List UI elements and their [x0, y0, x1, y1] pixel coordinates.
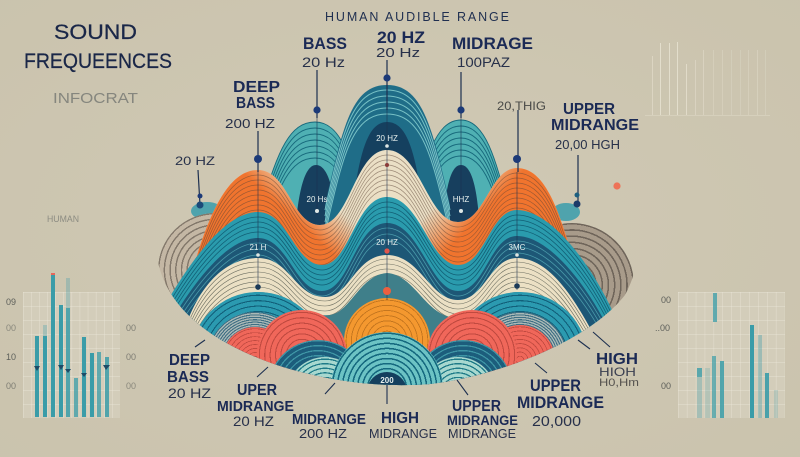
red accent dot [613, 182, 621, 190]
wave: cream [190, 255, 590, 386]
label: upper midrange right: MIDRANGE [551, 117, 639, 134]
label: upper midrange midrange [447, 398, 518, 441]
label: high [596, 351, 639, 389]
label: upper midrange lower left: MIDRANGE [217, 398, 294, 415]
label: upper midrange right: 20,00 HGH [555, 137, 620, 152]
inner band labels: 3MC [509, 243, 526, 252]
label: bass [302, 34, 347, 70]
wave: orange and cream [195, 150, 570, 400]
inner band labels: 20 HZ [376, 238, 398, 247]
chart: left axis numbers: 00 [6, 381, 16, 391]
label: 20 hz top: 20 HZ [377, 28, 425, 47]
label: midrange top [452, 34, 533, 70]
label: deep bass upper: 200 HZ [225, 116, 275, 131]
chart: right axis numbers: 00 [661, 295, 671, 305]
label: upper midrange lower left: 20 HZ [233, 413, 274, 429]
label: bass: BASS [303, 34, 347, 53]
label: high: HIOH [599, 365, 636, 379]
heading: human audible range: HUMAN AUDIBLE RANGE [325, 10, 509, 24]
label: 20 high: 20,THIG [497, 99, 546, 113]
arch: right coral [428, 310, 517, 383]
chart: left axis numbers: 09 [6, 297, 16, 307]
label: deep bass upper [225, 79, 280, 131]
label: upper midrange 20,000: MIDRANGE [517, 394, 604, 412]
label: midrange top: 100PAZ [457, 54, 510, 70]
arches: lower left [200, 292, 322, 377]
subtitle: INFOCRAT [53, 90, 138, 107]
label: midrange lower: 200 HZ [299, 426, 347, 441]
side hump: right grey [556, 203, 633, 317]
label: upper midrange midrange: UPPER [452, 398, 501, 415]
label: midrange lower [292, 411, 366, 441]
label: deep bass lower: 20 HZ [168, 385, 212, 401]
inner band labels: 20 Hs [307, 195, 327, 204]
label: upper midrange midrange: MIDRANGE [447, 412, 518, 428]
chart: left axis numbers: 00 [126, 323, 136, 333]
chart: left axis numbers [6, 297, 136, 391]
arch: left coral [257, 310, 346, 380]
wave: grey teal under band [210, 273, 572, 386]
marker dots [196, 74, 580, 295]
label: deep bass lower: DEEP [169, 352, 210, 369]
chart: right axis numbers [655, 295, 671, 391]
label: upper midrange 20,000 [517, 377, 604, 430]
label: upper midrange midrange: MIDRANGE [448, 427, 516, 441]
chart: left axis numbers: 00 [6, 323, 16, 333]
arch: right navy and pale [414, 340, 507, 385]
label: high midrange [369, 410, 437, 441]
label: midrange top: MIDRAGE [452, 34, 533, 53]
chart: right bars [678, 292, 785, 418]
wave: teal and navy [171, 197, 612, 386]
arch: left navy and pale [275, 340, 366, 384]
label: high midrange: HIGH [381, 410, 419, 427]
label: upper midrange 20,000: 20,000 [532, 414, 581, 430]
label: 20 hz left: 20 HZ [175, 154, 215, 168]
hump: left teal [271, 122, 341, 225]
label: deep bass lower [167, 352, 212, 401]
marker lines and dots [195, 60, 610, 404]
chart: left axis numbers: 00 [126, 352, 136, 362]
label: upper midrange right: UPPER [563, 101, 615, 118]
title: FREQUEENCES [24, 50, 172, 73]
label: 20 hz top: 20 Hz [376, 45, 420, 60]
chart: left bars [23, 273, 120, 418]
inner band labels: 21 H [250, 243, 267, 252]
chart: right axis numbers: ..00 [655, 323, 670, 333]
label: midrange lower: MIDRANGE [292, 411, 366, 428]
label: upper midrange 20,000: UPPER [530, 377, 581, 395]
hump: centre blue [325, 85, 450, 234]
label: upper midrange lower left [217, 382, 294, 429]
label: high: H0,Hm [599, 377, 639, 389]
hump: right teal [434, 120, 500, 222]
inner band labels: 200 [380, 376, 394, 385]
arch: centre bottom teal [332, 332, 443, 386]
label: 20 hz top [376, 28, 425, 60]
label: high: HIGH [596, 351, 638, 368]
label: bass: 20 Hz [302, 54, 345, 70]
side hump: left grey [158, 202, 218, 310]
chart: left axis numbers: 00 [126, 381, 136, 391]
label: deep bass upper: BASS [236, 95, 275, 112]
label: high midrange: MIDRANGE [369, 427, 437, 441]
title [24, 21, 172, 73]
panel: sound wave bowl [158, 85, 633, 386]
arch: centre orange [344, 298, 430, 350]
chart: right axis numbers: 00 [661, 381, 671, 391]
ghost chart: top right [645, 42, 770, 116]
side label: human: HUMAN [47, 214, 79, 224]
inner band labels [250, 134, 526, 385]
title: SOUND [54, 21, 137, 44]
label: upper midrange right [551, 101, 639, 152]
label: upper midrange lower left: UPER [237, 382, 277, 399]
chart: left axis numbers: 10 [6, 352, 16, 362]
label: deep bass lower: BASS [167, 369, 209, 386]
arches: lower right [460, 292, 582, 380]
inner band labels: HHZ [453, 195, 469, 204]
inner band labels: 20 HZ [376, 134, 398, 143]
label: deep bass upper: DEEP [233, 79, 280, 96]
